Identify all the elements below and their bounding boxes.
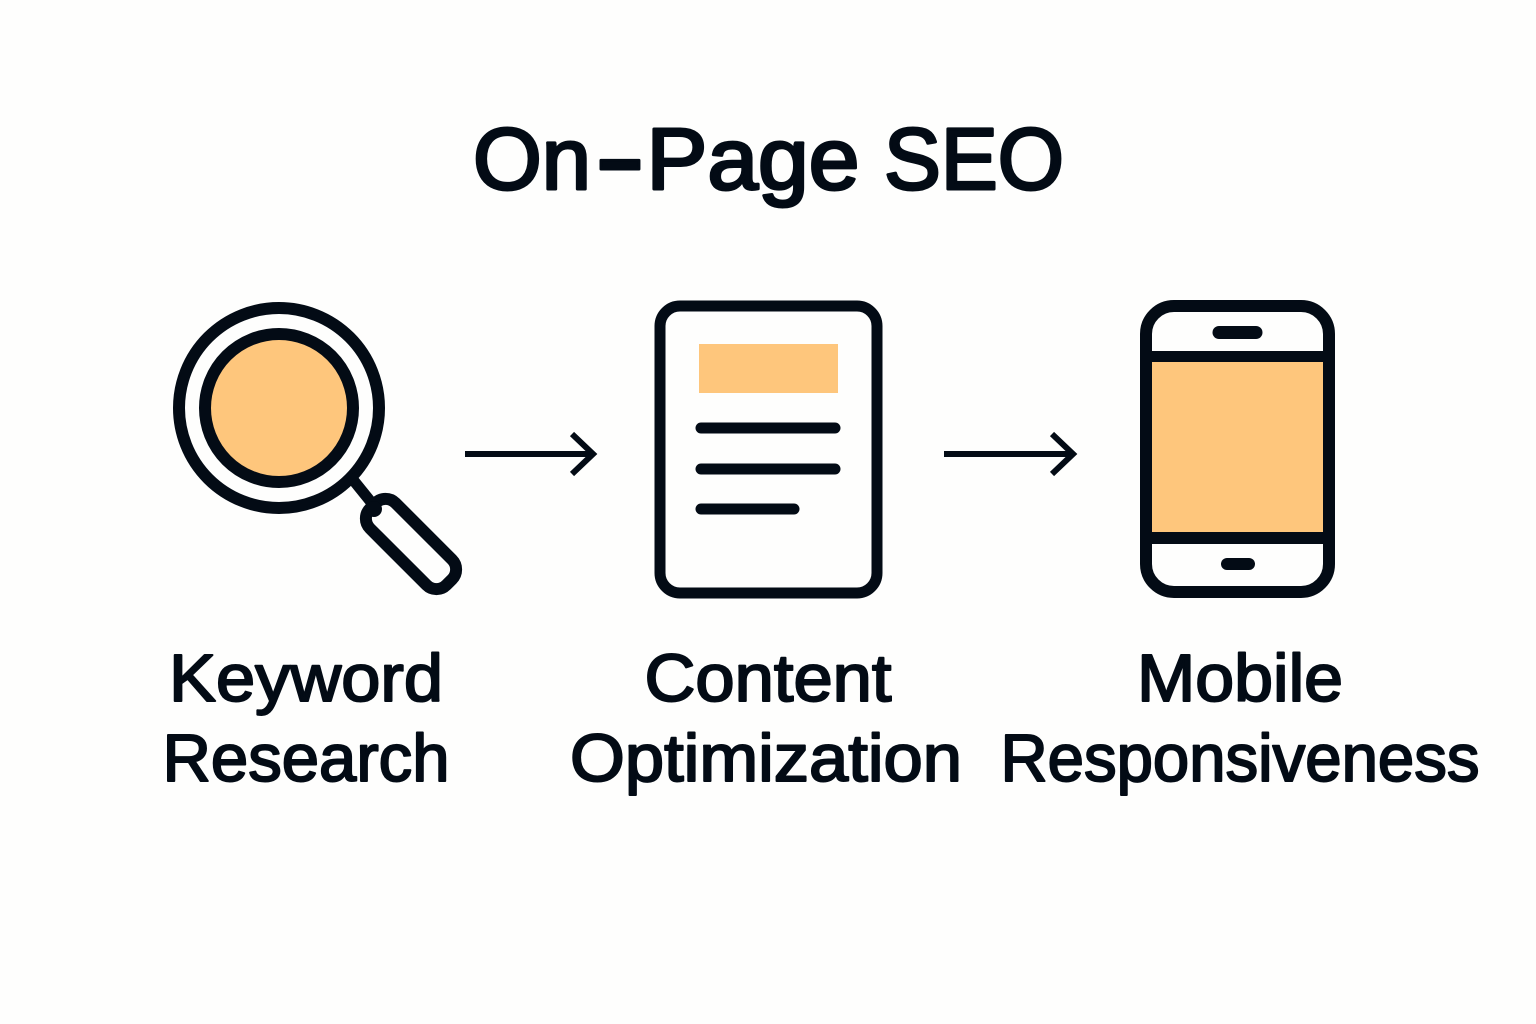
title: – (598, 110, 642, 207)
title: SEO (884, 111, 1064, 208)
label: mobile responsiveness: Responsiveness (1000, 721, 1480, 796)
label: content optimization (570, 641, 962, 796)
label: mobile responsiveness: Mobile (1137, 641, 1343, 716)
label: content optimization: Optimization (570, 721, 962, 796)
title: On (473, 111, 591, 208)
icon: smartphone (1146, 306, 1329, 592)
arrow: content to mobile (944, 434, 1073, 474)
label: keyword research: Keyword (169, 641, 443, 716)
label: keyword research: Research (162, 721, 450, 796)
label: content optimization: Content (644, 641, 892, 716)
arrow: research to content (465, 434, 593, 474)
label: mobile responsiveness (1000, 641, 1480, 796)
title: Page (646, 111, 860, 208)
title (473, 110, 1064, 208)
label: keyword research (162, 641, 450, 796)
icon: document (660, 306, 877, 593)
icon: magnifying glass (179, 308, 462, 595)
